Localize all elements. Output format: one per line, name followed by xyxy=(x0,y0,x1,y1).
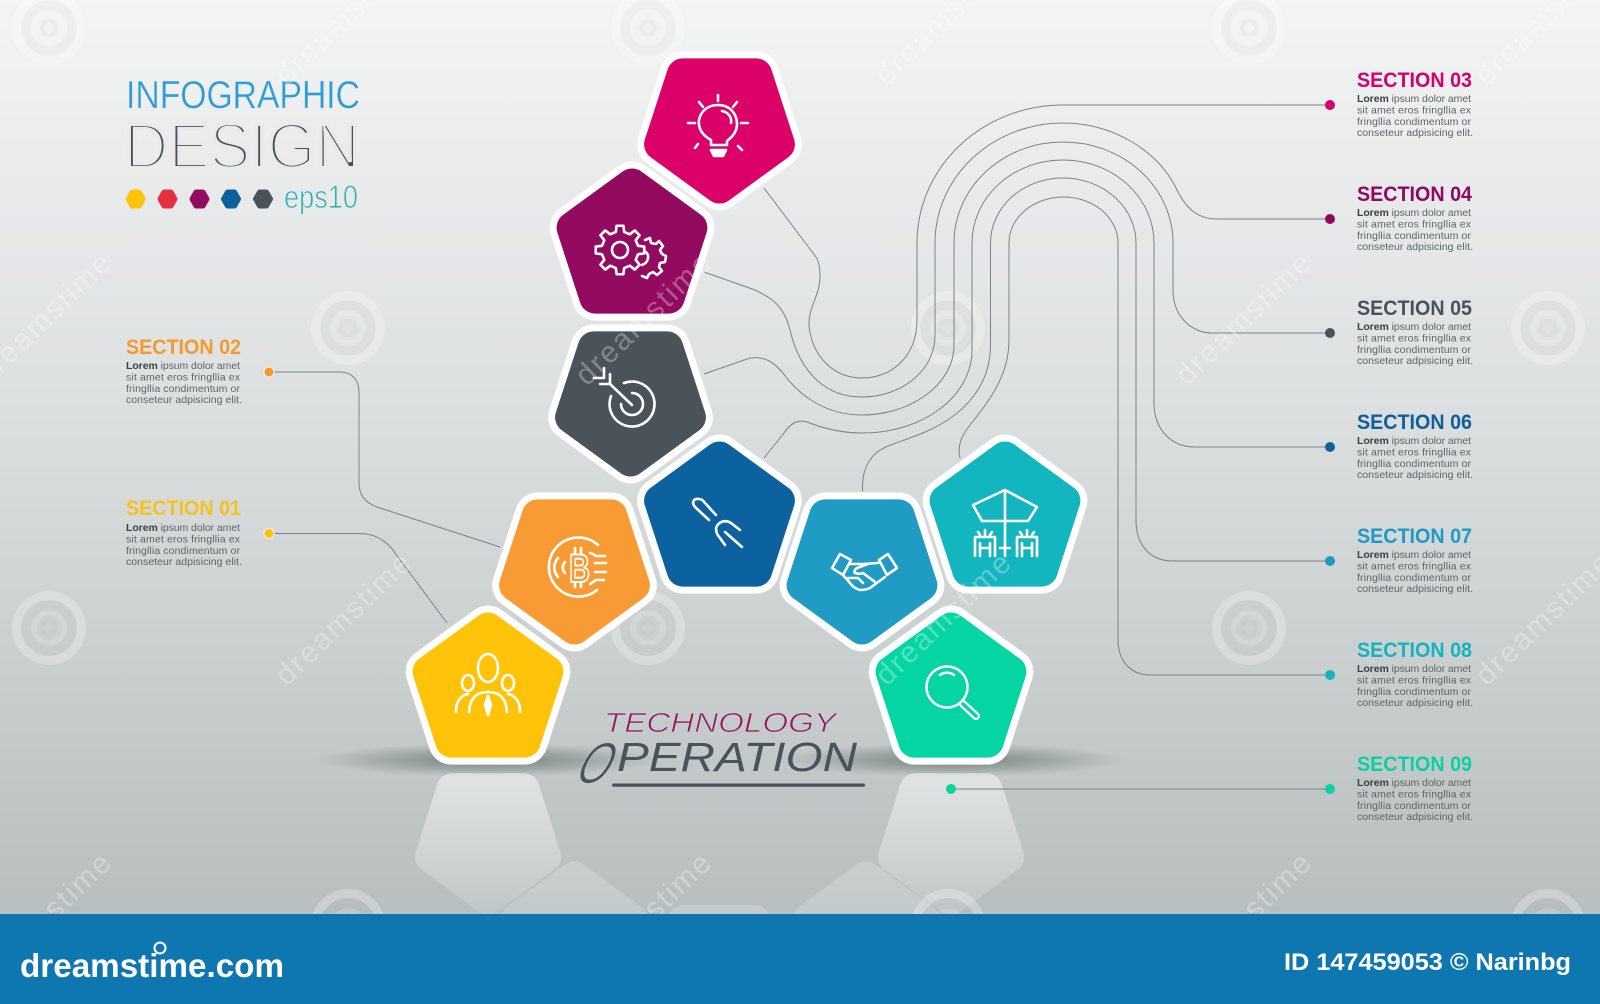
body text: conseteur adpisicing elit. xyxy=(126,556,242,568)
logo text: dreamstime.com xyxy=(20,947,284,984)
dot xyxy=(1325,556,1335,566)
body text: sit amet eros fringllia ex xyxy=(1357,674,1472,686)
body text: fringllia condimentum or xyxy=(126,545,240,557)
body text xyxy=(126,360,242,406)
body text: sit amet eros fringllia ex xyxy=(1357,788,1472,800)
body text: sit amet eros fringllia ex xyxy=(126,534,241,546)
image id: ID 147459053 © Narinbg xyxy=(1284,949,1571,976)
body text: Lorem ipsum dolor amet xyxy=(1357,435,1471,447)
body text: fringllia condimentum or xyxy=(1357,344,1472,356)
dot xyxy=(1325,100,1335,110)
panel: gray pentagon 05 xyxy=(571,347,690,460)
icon: light bulb xyxy=(688,95,748,156)
panel: blue pentagon 06 xyxy=(660,458,779,571)
body text xyxy=(1357,321,1473,367)
body text: sit amet eros fringllia ex xyxy=(1357,332,1472,344)
body text: Lorem ipsum dolor amet xyxy=(1357,93,1471,105)
label: SECTION 05 xyxy=(1357,297,1472,320)
eps label: eps10 xyxy=(284,179,358,215)
label: SECTION 09 xyxy=(1357,753,1472,776)
body text xyxy=(1357,663,1473,709)
dot xyxy=(1325,328,1335,338)
section 09 xyxy=(946,753,1473,823)
body text: fringllia condimentum or xyxy=(1357,572,1472,584)
label: SECTION 07 xyxy=(1357,525,1472,548)
body text: Lorem ipsum dolor amet xyxy=(1357,549,1471,561)
panel: green pentagon 09 xyxy=(892,628,1010,742)
body text: conseteur adpisicing elit. xyxy=(1357,241,1473,253)
label: SECTION 04 xyxy=(1357,183,1472,206)
body text: conseteur adpisicing elit. xyxy=(1357,127,1473,139)
icon: magnifier xyxy=(926,666,976,716)
heading: technology: TECHNOLOGY xyxy=(604,707,839,738)
dot xyxy=(1325,784,1335,794)
watermark text: dreamstime xyxy=(569,847,718,992)
body text xyxy=(1357,207,1473,253)
body text xyxy=(126,522,242,568)
section 03 xyxy=(1325,69,1473,139)
body text xyxy=(1357,777,1473,823)
start dot xyxy=(946,784,956,794)
body text xyxy=(1357,435,1473,481)
panel: orange pentagon 02 xyxy=(515,515,634,628)
panel: yellow pentagon 01 xyxy=(429,628,547,742)
body text: fringllia condimentum or xyxy=(1357,458,1472,470)
dot xyxy=(1325,670,1335,680)
icon: chain links xyxy=(693,499,742,547)
dot xyxy=(264,528,274,538)
floor shadows xyxy=(313,743,1126,777)
watermark text: dreamstime xyxy=(269,547,418,692)
panel: light blue pentagon 07 xyxy=(803,515,921,628)
body text: Lorem ipsum dolor amet xyxy=(126,522,240,534)
dot xyxy=(1325,442,1335,452)
body text: Lorem ipsum dolor amet xyxy=(126,360,240,372)
body text: Lorem ipsum dolor amet xyxy=(1357,777,1471,789)
body text: conseteur adpisicing elit. xyxy=(1357,697,1473,709)
section 06 xyxy=(1325,411,1473,481)
icon: team of people xyxy=(456,654,520,715)
panel: teal pentagon 08 xyxy=(946,458,1064,571)
label: SECTION 03 xyxy=(1357,69,1472,92)
heading: infographic: INFOGRAPHIC xyxy=(126,74,360,117)
body text: fringllia condimentum or xyxy=(1357,116,1472,128)
body text: sit amet eros fringllia ex xyxy=(1357,446,1472,458)
section 01 xyxy=(126,497,274,568)
body text: conseteur adpisicing elit. xyxy=(1357,811,1473,823)
label: SECTION 02 xyxy=(126,336,241,359)
section 05 xyxy=(1325,297,1473,367)
icon: bitcoin: B xyxy=(569,547,590,591)
title: infographic design xyxy=(124,74,360,215)
watermark text: dreamstime xyxy=(569,247,718,392)
heading: design: DESIGN xyxy=(124,110,360,182)
section 08 xyxy=(1325,639,1473,709)
label: SECTION 06 xyxy=(1357,411,1472,434)
body text: sit amet eros fringllia ex xyxy=(1357,104,1472,116)
body text: fringllia condimentum or xyxy=(126,383,240,395)
heading: peration: PERATION xyxy=(617,734,857,780)
underline xyxy=(612,784,865,787)
watermark text: dreamstime xyxy=(1169,847,1318,992)
watermark text: dreamstime xyxy=(1169,247,1318,392)
label: SECTION 01 xyxy=(126,497,241,520)
connector lines xyxy=(273,105,1330,789)
section 04 xyxy=(1325,183,1473,253)
body text xyxy=(1357,93,1473,139)
body text: Lorem ipsum dolor amet xyxy=(1357,663,1471,675)
body text: Lorem ipsum dolor amet xyxy=(1357,321,1471,333)
floor reflections xyxy=(415,773,1024,1004)
body text: sit amet eros fringllia ex xyxy=(1357,560,1472,572)
colour swatches xyxy=(128,192,270,206)
icon: target with arrow xyxy=(594,368,655,427)
body text: conseteur adpisicing elit. xyxy=(1357,583,1473,595)
dot xyxy=(264,367,274,377)
logo spiral xyxy=(154,942,166,954)
body text: fringllia condimentum or xyxy=(1357,230,1472,242)
icon: umbrella with tables xyxy=(973,490,1037,556)
center heading: technology operation xyxy=(566,707,865,796)
icon: handshake xyxy=(832,554,897,590)
panel: pink pentagon 03 xyxy=(660,74,779,188)
dot xyxy=(1325,214,1335,224)
label: SECTION 08 xyxy=(1357,639,1472,662)
body text: conseteur adpisicing elit. xyxy=(1357,469,1473,481)
body text: fringllia condimentum or xyxy=(1357,686,1472,698)
watermark text: dreamstime xyxy=(869,547,1018,692)
footer banner xyxy=(0,914,1600,1004)
body text: conseteur adpisicing elit. xyxy=(1357,355,1473,367)
heading: slanted letter O: O xyxy=(566,731,630,796)
icon: gears xyxy=(596,226,666,278)
body text: sit amet eros fringllia ex xyxy=(126,372,241,384)
body text: Lorem ipsum dolor amet xyxy=(1357,207,1471,219)
body text: fringllia condimentum or xyxy=(1357,800,1472,812)
panel: purple pentagon 04 xyxy=(573,184,691,298)
section 07 xyxy=(1325,525,1473,595)
body text: conseteur adpisicing elit. xyxy=(126,394,242,406)
body text xyxy=(1357,549,1473,595)
body text: sit amet eros fringllia ex xyxy=(1357,218,1472,230)
section 02 xyxy=(126,336,274,406)
